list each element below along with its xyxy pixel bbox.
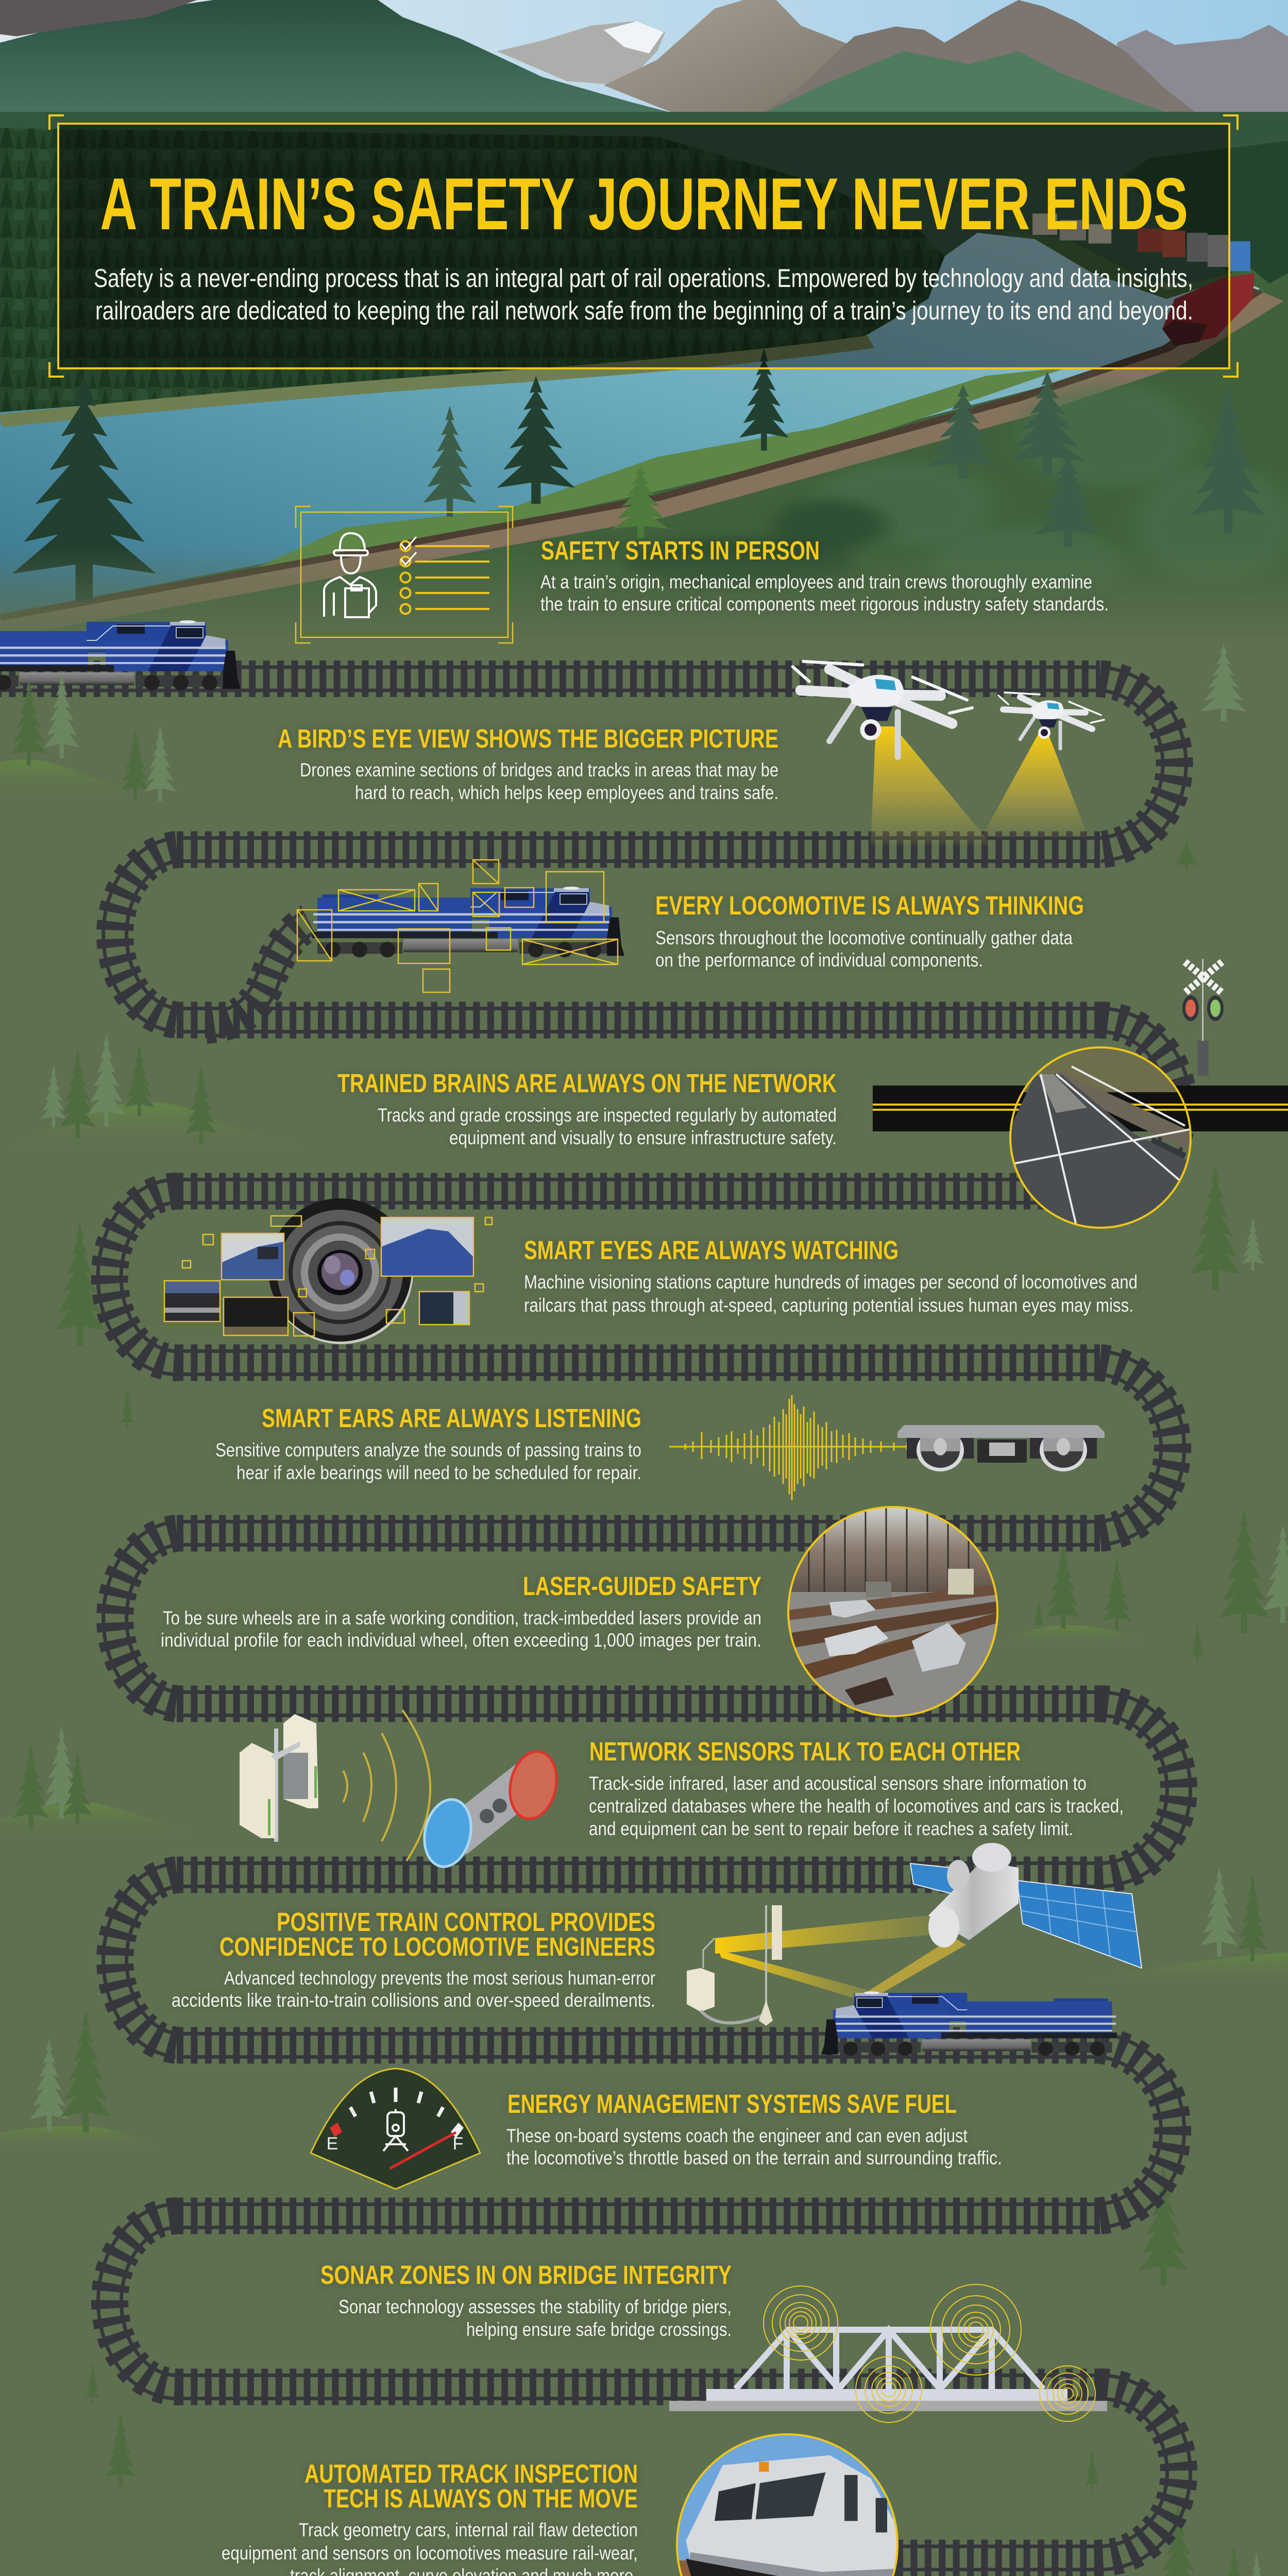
photo: track geometry car	[675, 2432, 904, 2576]
body text: helping ensure safe bridge crossings.	[466, 2319, 732, 2340]
body text: These on-board systems coach the engineer and can even adjust	[506, 2125, 968, 2146]
body text: and equipment can be sent to repair before it reaches a safety limit.	[589, 1818, 1073, 1839]
body text: centralized databases where the health of locomotives and cars is tracked,	[589, 1795, 1124, 1817]
section: every locomotive thinking	[655, 891, 1084, 971]
body text	[222, 2519, 638, 2576]
heading: SONAR ZONES IN ON BRIDGE INTEGRITY	[320, 2260, 732, 2290]
locomotive: positive train control	[821, 1991, 1117, 2056]
image: locomotive side	[222, 1233, 284, 1280]
section: trained brains	[337, 1069, 837, 1148]
heading: SMART EYES ARE ALWAYS WATCHING	[524, 1235, 899, 1265]
hills	[0, 759, 1288, 2576]
fade from photo into green ground	[0, 546, 1288, 672]
icon: fuel gauge: F	[453, 2134, 463, 2154]
body text: Advanced technology prevents the most serious human-error	[224, 1968, 655, 1989]
icon: fuel gauge: E	[327, 2134, 338, 2154]
section: automated track inspection	[222, 2459, 638, 2576]
body text: the train to ensure critical components meet rigorous industry safety standards.	[540, 594, 1109, 615]
heading: TRAINED BRAINS ARE ALWAYS ON THE NETWORK	[337, 1069, 837, 1098]
image: coupler	[419, 1292, 469, 1325]
section: positive train control	[172, 1907, 655, 2011]
image: wheels	[224, 1297, 288, 1335]
intro text	[94, 264, 1193, 325]
chart: sound waveform	[669, 1395, 933, 1500]
body text: At a train’s origin, mechanical employees and train crews thoroughly examine	[540, 571, 1092, 592]
body text: hear if axle bearings will need to be scheduled for repair.	[236, 1462, 641, 1483]
body text: Sensors throughout the locomotive continually gather data	[655, 927, 1073, 948]
icon: small drone	[998, 692, 1104, 749]
body text	[655, 927, 1073, 971]
icon: satellite	[910, 1843, 1142, 1968]
scene: mountain river photograph	[0, 0, 1288, 670]
icon: network sensors	[240, 1710, 563, 1871]
body text: Track-side infrared, laser and acoustical sensors share information to	[589, 1773, 1087, 1794]
pine trees	[13, 644, 1288, 2576]
body text: equipment and visually to ensure infrastructure safety.	[449, 1127, 837, 1148]
section: sonar	[320, 2260, 732, 2340]
locomotive: starting train	[0, 620, 241, 690]
body text: railcars that pass through at-speed, capturing potential issues human eyes may miss.	[524, 1295, 1133, 1316]
body text: Track geometry cars, internal rail flaw detection	[299, 2519, 638, 2540]
drone beams	[871, 726, 1088, 845]
icon: truss bridge with sonar	[669, 2284, 1107, 2422]
icon: large drone	[793, 662, 972, 757]
heading: A BIRD’S EYE VIEW SHOWS THE BIGGER PICTURE	[278, 724, 778, 753]
heading: TECH IS ALWAYS ON THE MOVE	[324, 2484, 638, 2513]
body text: on the performance of individual components.	[655, 950, 983, 971]
photo: grade crossing	[1010, 1046, 1195, 1231]
body text: Sonar technology assesses the stability of bridge piers,	[338, 2296, 732, 2317]
locomotive with sensor boxes	[297, 860, 624, 992]
icon: wayside antenna	[687, 1905, 782, 2026]
body text: Machine visioning stations capture hundreds of images per second of locomotives and	[524, 1272, 1138, 1293]
body text: Drones examine sections of bridges and tracks in areas that may be	[300, 759, 778, 781]
body text: the locomotive’s throttle based on the terrain and surrounding traffic.	[506, 2147, 1002, 2168]
body text	[300, 759, 778, 803]
section: laser-guided safety	[161, 1571, 761, 1651]
trees in front of train	[11, 673, 80, 765]
road with yellow lines	[873, 1086, 1288, 1131]
icon: train in gauge	[383, 2109, 408, 2151]
icon: camera lens with images	[164, 1198, 492, 1344]
body text	[161, 1607, 761, 1651]
body text	[378, 1105, 837, 1148]
icon: rail truck wheels	[897, 1425, 1105, 1471]
body text	[506, 2125, 1002, 2168]
section: bird's eye view	[278, 724, 778, 803]
heading: SMART EARS ARE ALWAYS LISTENING	[262, 1403, 641, 1433]
heading: EVERY LOCOMOTIVE IS ALWAYS THINKING	[655, 891, 1084, 920]
icon: inspector with checklist	[296, 506, 513, 643]
body text: Tracks and grade crossings are inspected regularly by automated	[378, 1105, 837, 1126]
body text	[338, 2296, 732, 2340]
body text: accidents like train-to-train collisions and over-speed derailments.	[172, 1990, 655, 2011]
heading: POSITIVE TRAIN CONTROL PROVIDES	[277, 1907, 655, 1937]
heading: LASER-GUIDED SAFETY	[523, 1571, 761, 1601]
body text: equipment and sensors on locomotives measure rail-wear,	[222, 2543, 638, 2564]
section: energy management	[506, 2089, 1002, 2168]
section: smart ears	[215, 1403, 641, 1483]
body text: Sensitive computers analyze the sounds of passing trains to	[215, 1439, 641, 1461]
icon: fuel gauge	[311, 2069, 480, 2189]
image: locomotive front	[381, 1217, 473, 1276]
body text: To be sure wheels are in a safe working condition, track-imbedded lasers provide an	[163, 1607, 761, 1629]
winding railroad track	[0, 618, 1288, 2576]
image: locomotive body	[164, 1281, 220, 1321]
section: safety starts in person	[540, 536, 1109, 615]
heading	[219, 1907, 655, 1961]
body text	[172, 1968, 655, 2011]
heading: ENERGY MANAGEMENT SYSTEMS SAVE FUEL	[507, 2089, 957, 2119]
body text	[540, 571, 1109, 615]
section: smart eyes	[524, 1235, 1138, 1316]
icon: crossing signal	[1182, 959, 1224, 1076]
section: network sensors	[589, 1737, 1124, 1839]
body text	[215, 1439, 641, 1483]
heading: SAFETY STARTS IN PERSON	[541, 536, 820, 565]
heading	[304, 2459, 638, 2513]
body text: hard to reach, which helps keep employees and trains safe.	[355, 782, 778, 803]
heading: AUTOMATED TRACK INSPECTION	[304, 2459, 638, 2488]
body text: individual profile for each individual wheel, often exceeding 1,000 images per train.	[161, 1630, 761, 1651]
heading: NETWORK SENSORS TALK TO EACH OTHER	[589, 1737, 1021, 1766]
photo: track-side laser units	[788, 1507, 997, 1718]
body text	[589, 1773, 1124, 1839]
heading: CONFIDENCE TO LOCOMOTIVE ENGINEERS	[219, 1932, 655, 1961]
body text	[524, 1272, 1138, 1316]
signal beams	[715, 1915, 966, 2002]
title panel	[49, 115, 1238, 377]
